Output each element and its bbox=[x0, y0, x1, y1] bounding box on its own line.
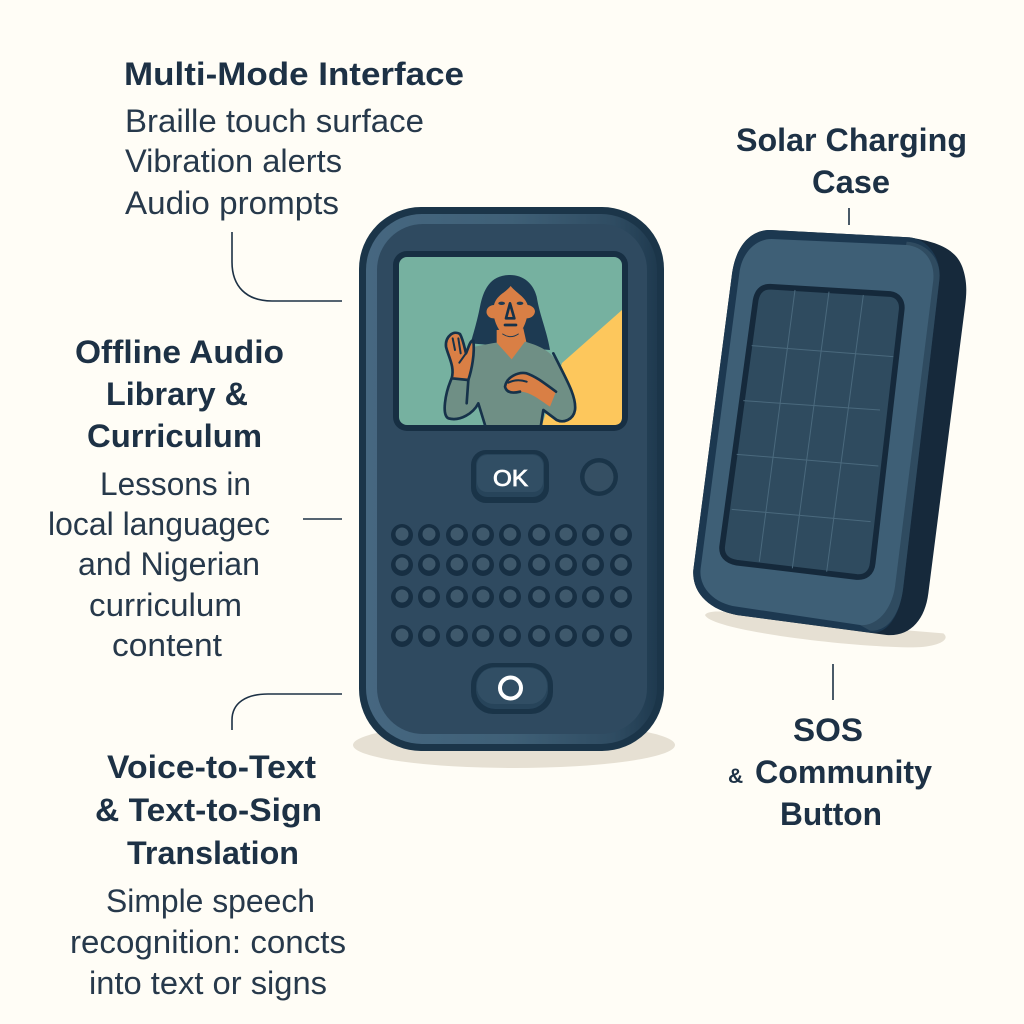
callout: Multi-Mode Interface bbox=[124, 56, 464, 221]
main phone device bbox=[359, 207, 664, 751]
callout: Voice-to-Text and Text-to-Sign Translation: & Text-to-Sign bbox=[95, 792, 322, 828]
callout: Offline Audio Library and Curriculum: content bbox=[112, 627, 222, 663]
callout: Solar Charging Case: Solar Charging bbox=[736, 122, 967, 158]
callout: Offline Audio Library and Curriculum: local languagec bbox=[48, 506, 270, 542]
callout: SOS and Community Button: & bbox=[728, 765, 743, 788]
OK button bbox=[471, 450, 549, 503]
home button with ring bbox=[471, 663, 553, 714]
callout: Offline Audio Library and Curriculum bbox=[48, 334, 284, 663]
callout: Offline Audio Library and Curriculum: Library & bbox=[106, 376, 248, 412]
connector: Multi-Mode Interface to phone bbox=[232, 232, 342, 301]
callout: SOS and Community Button: Button bbox=[780, 796, 882, 832]
callout: Voice-to-Text and Text-to-Sign Translation: Voice-to-Text bbox=[107, 749, 316, 785]
phone face bbox=[377, 224, 647, 734]
callout: Multi-Mode Interface: Vibration alerts bbox=[125, 143, 342, 179]
person signing bbox=[445, 275, 575, 425]
case shadow bbox=[705, 611, 946, 647]
OK button: OK bbox=[493, 465, 529, 491]
case front rim bbox=[693, 230, 940, 633]
callout: Multi-Mode Interface: Audio prompts bbox=[125, 185, 339, 221]
callout: Solar Charging Case: Case bbox=[812, 164, 890, 200]
solar charging case bbox=[693, 230, 966, 647]
yellow background wedge bbox=[542, 310, 622, 425]
round side button bbox=[580, 458, 618, 496]
callout: Voice-to-Text and Text-to-Sign Translation: into text or signs bbox=[89, 965, 327, 1001]
braille dot grid bbox=[391, 524, 632, 647]
case rear edge bbox=[693, 230, 966, 635]
callout: SOS and Community Button: Community bbox=[755, 754, 932, 790]
callout: Voice-to-Text and Text-to-Sign Translation: Translation bbox=[127, 835, 299, 871]
callout: Offline Audio Library and Curriculum: Curriculum bbox=[87, 418, 262, 454]
case side bevel bbox=[860, 242, 940, 631]
connector: SOS label to device bbox=[832, 664, 834, 700]
callout: Voice-to-Text and Text-to-Sign Translation: Simple speech bbox=[106, 883, 315, 919]
connector: Solar Case label to case bbox=[848, 208, 850, 225]
connector: Offline Audio to phone bbox=[303, 518, 342, 520]
callout: Offline Audio Library and Curriculum: Offline Audio bbox=[75, 334, 284, 370]
callout: SOS and Community Button bbox=[728, 712, 932, 832]
callout: Solar Charging Case bbox=[736, 122, 967, 200]
screen bbox=[393, 251, 628, 431]
callout: Offline Audio Library and Curriculum: curriculum bbox=[89, 587, 242, 623]
callout: Voice-to-Text and Text-to-Sign Translation bbox=[70, 749, 346, 1001]
phone casing bbox=[359, 207, 664, 751]
callout: Multi-Mode Interface: Multi-Mode Interface bbox=[124, 56, 464, 92]
callout: SOS and Community Button: SOS bbox=[793, 712, 863, 748]
callout: Voice-to-Text and Text-to-Sign Translation: recognition: concts bbox=[70, 924, 346, 960]
solar panel bbox=[722, 287, 902, 577]
callout: Offline Audio Library and Curriculum: Lessons in bbox=[100, 466, 251, 502]
connector: Voice-to-Text to phone bbox=[232, 694, 342, 730]
callout: Offline Audio Library and Curriculum: and Nigerian bbox=[78, 546, 260, 582]
phone bevel bbox=[366, 214, 657, 744]
callout: Multi-Mode Interface: Braille touch surface bbox=[125, 103, 424, 139]
phone shadow bbox=[353, 722, 675, 768]
case front face bbox=[700, 239, 933, 625]
